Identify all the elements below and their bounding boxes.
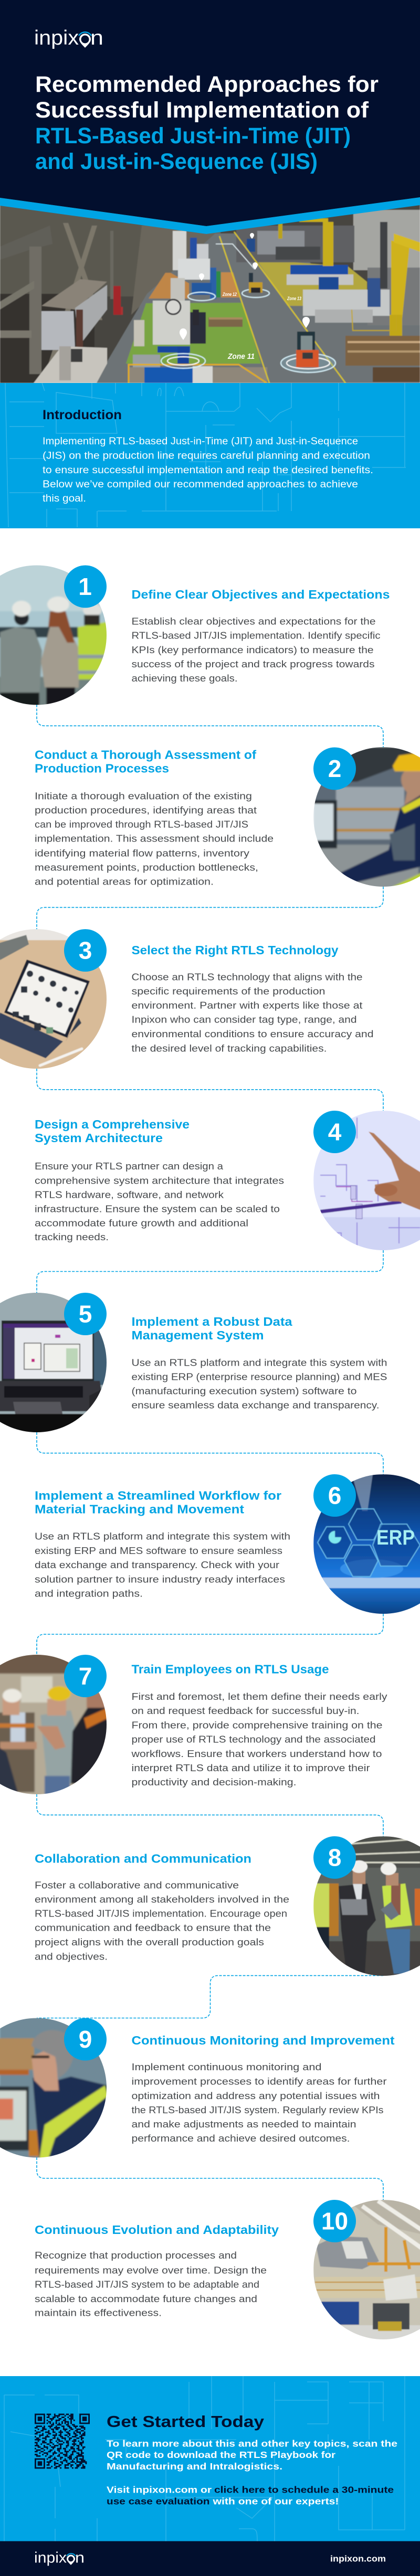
title: RTLS-Based Just-in-Time (JIT) xyxy=(35,123,351,148)
body text: Ensure your RTLS partner can design a xyxy=(35,1161,224,1172)
body text: RTLS hardware, software, and network xyxy=(35,1189,224,1200)
body text: and make adjustments as needed to maintain xyxy=(131,2119,356,2130)
CTA heading: Get Started Today xyxy=(107,2412,265,2431)
body text: Use an RTLS platform and integrate this system with xyxy=(35,1531,290,1541)
heading xyxy=(131,1315,293,1342)
step 9 xyxy=(0,2017,395,2159)
body text: RTLS-based JIT/JIS implementation. Encourage open xyxy=(35,1909,287,1919)
panel: hero photo of factory floor xyxy=(0,197,420,383)
footer logo: inpix xyxy=(34,2550,67,2567)
footer URL: inpixon.com xyxy=(330,2554,386,2564)
heading xyxy=(35,1488,281,1516)
body text: Implement continuous monitoring and xyxy=(131,2062,321,2072)
badge: 7: 7 xyxy=(79,1662,92,1689)
footer logo xyxy=(34,2550,85,2567)
intro text: Below we’ve compiled our recommended approaches to achieve xyxy=(43,479,358,490)
zone labels: Zone 13 xyxy=(287,296,301,301)
body text xyxy=(35,1161,284,1242)
photo: hand pointing at system diagram xyxy=(313,1111,420,1254)
body text: communication and feedback to ensure that the xyxy=(35,1923,271,1933)
QR code xyxy=(35,2414,89,2468)
title xyxy=(35,72,379,174)
CTA text: use case evaluation xyxy=(107,2496,210,2507)
photo: operator at analytics monitor xyxy=(0,2017,110,2159)
title: Successful Implementation of xyxy=(35,98,369,123)
body text: performance and achieve desired outcomes. xyxy=(131,2133,350,2144)
body text: achieving these goals. xyxy=(131,673,237,684)
badge: 1 xyxy=(64,566,107,608)
body text: data exchange and transparency. Check with your xyxy=(35,1560,279,1570)
heading: Production Processes xyxy=(35,762,169,775)
heading: Select the Right RTLS Technology xyxy=(131,943,338,957)
chevron blue band xyxy=(0,197,420,234)
header: navy chevron background xyxy=(0,0,420,226)
photo: engineers facing a screen xyxy=(0,564,110,708)
badge: 4: 4 xyxy=(328,1119,342,1146)
CTA text: Visit inpixon.com or xyxy=(107,2484,212,2495)
badge: 5: 5 xyxy=(79,1300,92,1327)
badge: 9 xyxy=(64,2018,107,2061)
body text: optimization and address any potential issues with xyxy=(131,2091,380,2101)
intro text: Implementing RTLS-based Just-in-Time (JIT) and Just-in-Sequence xyxy=(43,436,358,447)
body text: workflows. Ensure that workers understand how to xyxy=(131,1749,382,1759)
body text: specific requirements of the production xyxy=(131,986,326,996)
body text: proper use of RTLS technology and the associated xyxy=(131,1734,376,1745)
body text: tracking needs. xyxy=(35,1232,109,1242)
CTA text: with one of our experts! xyxy=(212,2496,339,2507)
body text: environmental conditions to ensure accuracy and xyxy=(131,1029,374,1039)
heading: Define Clear Objectives and Expectations xyxy=(131,588,390,601)
body text: Use an RTLS platform and integrate this system with xyxy=(131,1358,387,1368)
heading: Implement a Robust Data xyxy=(131,1315,293,1328)
zone labels: Zone 12 xyxy=(222,292,237,297)
heading: Material Tracking and Movement xyxy=(35,1503,244,1516)
body text: and potential areas for optimization. xyxy=(35,876,214,887)
footer logo: n xyxy=(75,2550,85,2567)
body text: environment among all stakeholders involved in the xyxy=(35,1894,289,1904)
badge: 8: 8 xyxy=(328,1844,341,1871)
title: Recommended Approaches for xyxy=(35,72,379,97)
body text xyxy=(35,2250,267,2318)
body text: Initiate a thorough evaluation of the existing xyxy=(35,791,252,802)
CTA text: QR code to download the RTLS Playbook for xyxy=(107,2450,335,2460)
step 1 xyxy=(0,564,390,708)
body text: Foster a collaborative and communicative xyxy=(35,1880,239,1890)
body text xyxy=(131,1691,387,1787)
badge: 5 xyxy=(64,1293,107,1335)
body text: environment. Partner with experts like those at xyxy=(131,1000,362,1010)
body text: RTLS-based JIT/JIS implementation. Identify specific xyxy=(131,631,380,641)
badge: 2 xyxy=(313,747,356,790)
body text: improvement processes to identify areas for further xyxy=(131,2077,386,2087)
heading: Conduct a Thorough Assessment of xyxy=(35,748,256,761)
step 10 xyxy=(35,2200,420,2344)
badge: 2: 2 xyxy=(328,755,341,782)
badge: 10 xyxy=(313,2200,356,2242)
CTA text: Manufacturing and Intralogistics. xyxy=(107,2461,282,2472)
zone labels xyxy=(222,292,301,361)
body text: production procedures, identifying areas that xyxy=(35,805,257,816)
body text: the RTLS-based JIT/JIS system. Regularly review KPIs xyxy=(131,2105,383,2115)
body text: Choose an RTLS technology that aligns with the xyxy=(131,972,362,982)
heading: Implement a Streamlined Workflow for xyxy=(35,1488,281,1502)
logo: inpixon: inpix xyxy=(34,27,79,49)
heading: Continuous Monitoring and Improvement xyxy=(131,2034,395,2047)
badge: 8 xyxy=(313,1836,356,1879)
badge: 6 xyxy=(313,1474,356,1517)
body text: and objectives. xyxy=(35,1951,108,1962)
badge: 3: 3 xyxy=(79,937,92,964)
badge: 7 xyxy=(64,1655,107,1697)
logo: inpixon xyxy=(34,27,103,49)
body text xyxy=(131,2062,386,2144)
badge: 9: 9 xyxy=(79,2026,92,2053)
body text: implementation. This assessment should include xyxy=(35,834,274,844)
body text: comprehensive system architecture that integrates xyxy=(35,1175,284,1186)
body text xyxy=(35,791,274,887)
body text: interpret RTLS data and utilize it to improve their xyxy=(131,1763,370,1773)
step 2 xyxy=(35,747,420,892)
heading: Collaboration and Communication xyxy=(35,1851,251,1865)
photo: inspectors with laptop on site xyxy=(313,1836,420,1978)
body text: infrastructure. Ensure the system can be scaled to xyxy=(35,1204,280,1214)
body text: Inpixon who can consider tag type, range, and xyxy=(131,1015,357,1025)
CTA text xyxy=(107,2439,397,2507)
photo: worker at monitor in warehouse xyxy=(313,747,420,892)
body text: scalable to accommodate future changes and xyxy=(35,2294,257,2304)
body text: solution partner to insure industry ready interfaces xyxy=(35,1574,285,1584)
step 5 xyxy=(0,1291,387,1438)
body text xyxy=(35,1531,290,1599)
heading xyxy=(35,1117,190,1145)
body text: requirements may evolve over time. Design the xyxy=(35,2265,267,2276)
CTA text: click here to schedule a 30-minute xyxy=(214,2484,394,2495)
intro text: this goal. xyxy=(43,493,86,504)
connectors: dashed path between steps xyxy=(37,705,383,2200)
body text: productivity and decision-making. xyxy=(131,1777,296,1787)
body text: First and foremost, let them define their needs early xyxy=(131,1691,387,1702)
step 8 xyxy=(35,1836,420,1978)
title: and Just-in-Sequence (JIS) xyxy=(35,149,318,174)
body text: (manufacturing execution system) software to xyxy=(131,1386,357,1397)
heading: Management System xyxy=(131,1328,264,1342)
step 6 xyxy=(35,1474,420,1616)
body text: existing ERP and MES software to ensure seamless xyxy=(35,1546,282,1556)
heading: Train Employees on RTLS Usage xyxy=(131,1662,329,1676)
badge: 6: 6 xyxy=(328,1482,341,1509)
badge: 10: 10 xyxy=(321,2208,348,2235)
body text: accommodate future growth and additional xyxy=(35,1218,248,1229)
footer bar xyxy=(0,2541,420,2576)
body text: identifying material flow patterns, inventory xyxy=(35,848,249,858)
intro heading: Introduction xyxy=(43,408,122,422)
body text xyxy=(131,972,374,1053)
photo: ERP hexagon interface: ERP xyxy=(376,1526,415,1549)
body text: can be improved through RTLS-based JIT/JIS xyxy=(35,819,248,830)
panel: introduction xyxy=(0,383,420,528)
photo: tablet on wooden desk xyxy=(0,929,110,1070)
heading: Continuous Evolution and Adaptability xyxy=(35,2223,279,2237)
logo: inpixon: n xyxy=(90,27,103,49)
body text: the desired level of tracking capabilities. xyxy=(131,1043,327,1053)
badge: 4 xyxy=(313,1111,356,1153)
body text: project aligns with the overall production goals xyxy=(35,1937,264,1947)
body text: Recognize that production processes and xyxy=(35,2250,237,2261)
heading: System Architecture xyxy=(35,1131,163,1145)
step 3 xyxy=(0,929,374,1070)
body text xyxy=(131,1358,387,1410)
body text: on and request feedback for successful buy-in. xyxy=(131,1706,359,1716)
body text: maintain its effectiveness. xyxy=(35,2307,162,2318)
photo: ERP hexagon interface xyxy=(313,1474,420,1616)
body text: and integration paths. xyxy=(35,1588,143,1599)
body text: measurement points, production bottlenecks, xyxy=(35,862,258,872)
body text xyxy=(35,1880,289,1962)
body text: existing ERP (enterprise resource planning) and MES xyxy=(131,1372,387,1382)
badge: 1: 1 xyxy=(78,573,92,600)
intro text: to ensure successful implementation and reap the desired benefits. xyxy=(43,465,373,476)
panel: get started call to action xyxy=(0,2376,420,2541)
photo: automotive assembly line xyxy=(313,2200,420,2344)
heading: Design a Comprehensive xyxy=(35,1117,190,1131)
body text: KPIs (key performance indicators) to measure the xyxy=(131,645,374,655)
CTA text: To learn more about this and other key topics, scan the xyxy=(107,2439,397,2449)
step 4 xyxy=(35,1111,420,1254)
zone labels: Zone 11 xyxy=(227,352,255,361)
intro text: (JIS) on the production line requires careful planning and execution xyxy=(43,450,370,462)
body text xyxy=(131,616,380,684)
intro text xyxy=(43,436,373,504)
body text: From there, provide comprehensive training on the xyxy=(131,1720,382,1731)
photo: laptop showing floor plan xyxy=(0,1291,110,1438)
badge: 3 xyxy=(64,929,107,972)
body text: success of the project and track progress towards xyxy=(131,659,375,669)
step 7 xyxy=(0,1653,387,1797)
icon: location pins xyxy=(180,233,310,340)
body text: ensure seamless data exchange and transparency. xyxy=(131,1400,379,1410)
body text: Establish clear objectives and expectations for the xyxy=(131,616,376,627)
photo: workers talking in hard hats xyxy=(0,1653,110,1797)
body text: RTLS-based JIT/JIS system to be adaptable and xyxy=(35,2280,259,2290)
heading xyxy=(35,748,256,775)
